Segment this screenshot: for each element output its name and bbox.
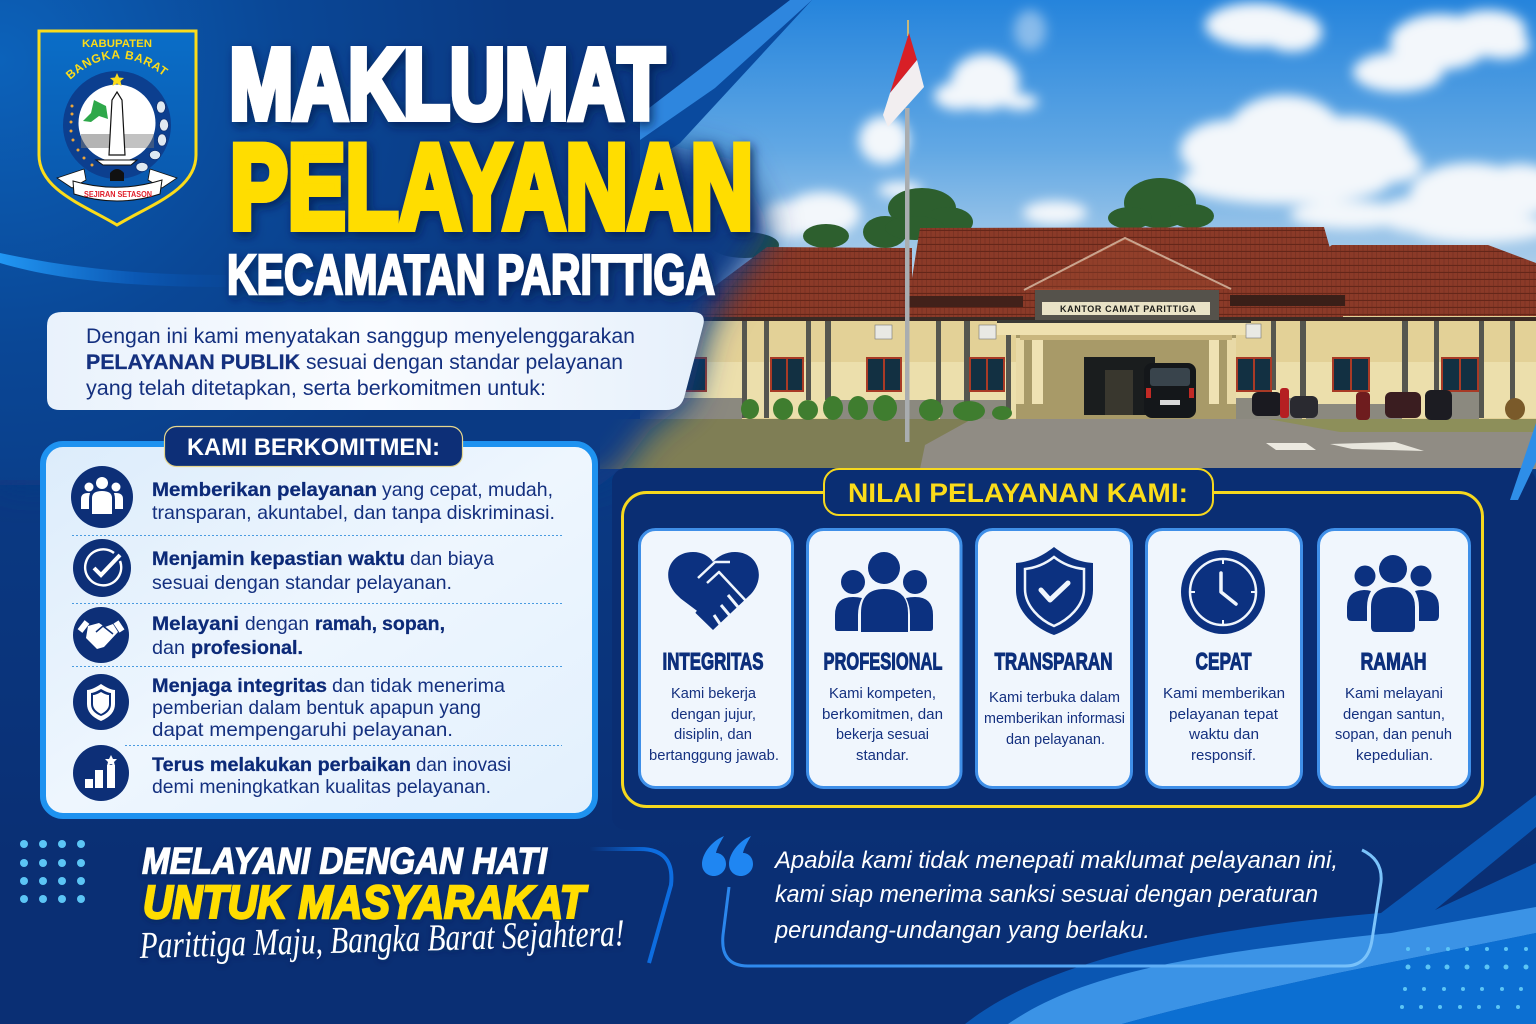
top diagonal band — [0, 0, 812, 170]
card: transparan: memberikan informasi — [984, 711, 1125, 727]
card: integritas: Kami bekerja — [671, 686, 757, 702]
dividers — [72, 536, 562, 746]
icon: handshake — [73, 607, 129, 663]
flag pole — [905, 108, 910, 442]
heading pill: nilai pelayanan: NILAI PELAYANAN KAMI: — [848, 478, 1188, 508]
commitment row 3: sopan, — [382, 613, 445, 635]
card: integritas: INTEGRITAS — [662, 648, 764, 676]
motorcycles — [1252, 388, 1452, 420]
commitment row 1: transparan, akuntabel, dan tanpa diskriminasi. — [152, 502, 555, 524]
heading pill: kami berkomitmen — [164, 426, 462, 466]
shrubs — [741, 395, 1525, 421]
wall base patches — [640, 392, 1479, 419]
quote frame — [723, 850, 1381, 966]
icon: people — [71, 466, 133, 528]
logo: Kabupaten Bangka Barat: KABUPATEN — [82, 38, 152, 50]
card: transparan: Kami terbuka dalam — [989, 690, 1120, 706]
left gradient fill — [0, 0, 560, 480]
commitment row 1 — [71, 466, 555, 528]
slogan line 1: MELAYANI DENGAN HATI — [142, 840, 548, 882]
quote text: kami siap menerima sanksi sesuai dengan peraturan — [775, 881, 1318, 908]
trees — [711, 178, 1214, 258]
quote text — [773, 847, 1338, 944]
commitment row 3: profesional. — [191, 637, 303, 659]
intro text panel: yang telah ditetapkan, serta berkomitmen untuk: — [86, 376, 546, 400]
card: transparan — [976, 530, 1132, 788]
card: integritas: disiplin, dan — [674, 727, 752, 743]
card: cepat: Kami memberikan — [1163, 686, 1285, 702]
commitment row 4: pemberian dalam bentuk apapun yang — [152, 697, 481, 719]
gable — [1035, 290, 1219, 322]
commitment row 5 — [73, 745, 511, 801]
card: cepat: waktu dan — [1188, 727, 1259, 743]
icon: growth chart — [73, 745, 129, 801]
top dark triangle — [0, 0, 790, 200]
card: integritas: dengan jujur, — [671, 707, 756, 723]
card: profesional: berkomitmen, dan — [822, 707, 943, 723]
icon: people — [1347, 555, 1439, 632]
icon: heart handshake — [668, 552, 759, 630]
dot grid bottom right — [1400, 947, 1528, 1009]
card: profesional: PROFESIONAL — [824, 648, 942, 676]
streak right of nilai panel — [1510, 423, 1536, 500]
roofs — [909, 227, 1343, 318]
commitment row 2: dan biaya — [410, 548, 494, 570]
card: ramah: dengan santun, — [1343, 707, 1445, 723]
windows — [681, 358, 1478, 391]
card: integritas: bertanggung jawab. — [649, 748, 779, 764]
card: profesional: bekerja sesuai — [836, 727, 929, 743]
heading pill: kami berkomitmen: KAMI BERKOMITMEN: — [187, 434, 440, 461]
card: ramah — [1318, 530, 1470, 788]
panel backdrop fade over photo — [0, 143, 772, 485]
card: profesional: standar. — [856, 748, 909, 764]
title line: Kecamatan Parittiga: KECAMATAN PARITTIGA — [227, 243, 715, 306]
slogan line 2: UNTUK MASYARAKAT — [143, 876, 588, 928]
quote text: Apabila kami tidak menepati maklumat pelayanan ini, — [773, 847, 1338, 874]
commitment row 4: Menjaga integritas — [152, 675, 327, 697]
commitment row 5: dan inovasi — [416, 754, 511, 776]
card: ramah: kepedulian. — [1356, 748, 1433, 764]
title line: Pelayanan: PELAYANAN — [230, 120, 753, 254]
quote text: perundang-undangan yang berlaku. — [774, 917, 1150, 944]
icon: quotation mark — [702, 836, 753, 876]
commitment row 3: Melayani — [152, 613, 239, 635]
commitment row 3 — [73, 607, 445, 663]
commitment row 2 — [73, 539, 494, 597]
lower fade — [0, 470, 1536, 1024]
icon: check — [73, 539, 131, 597]
logo: Kabupaten Bangka Barat — [38, 30, 198, 227]
left wave — [0, 253, 226, 287]
entrance — [1016, 335, 1236, 420]
clouds — [758, 3, 1536, 243]
card: profesional — [808, 530, 961, 788]
intro text panel: sesuai dengan standar pelayanan — [306, 350, 623, 374]
card: integritas — [640, 530, 792, 788]
commitment row 3: ramah, — [315, 613, 377, 635]
panel: nilai pelayanan kami — [622, 469, 1482, 806]
icon: shield check — [1016, 547, 1093, 635]
card: ramah: RAMAH — [1360, 648, 1426, 676]
commitment row 1: yang cepat, mudah, — [382, 479, 553, 501]
icon: shield — [73, 674, 129, 730]
commitment row 5: Terus melakukan perbaikan — [152, 754, 411, 776]
logo: Kabupaten Bangka Barat: SEJIRAN SETASON — [84, 189, 152, 199]
commitment row 2: Menjamin kepastian waktu — [152, 548, 405, 570]
card: ramah: sopan, dan penuh — [1335, 727, 1452, 743]
heading pill: nilai pelayanan — [824, 469, 1213, 515]
sign board — [1042, 302, 1210, 315]
commitment row 2: sesuai dengan standar pelayanan. — [152, 572, 452, 594]
intro text panel: PELAYANAN PUBLIK — [86, 350, 300, 374]
card: cepat: pelayanan tepat — [1169, 707, 1278, 723]
car — [1144, 363, 1196, 418]
AC units — [875, 324, 1261, 339]
commitment row 3: dengan — [245, 613, 309, 635]
sky — [600, 0, 1536, 300]
commitment row 3: dan — [152, 637, 185, 659]
title: main heading — [227, 28, 753, 306]
commitment row 5: demi meningkatkan kualitas pelayanan. — [152, 776, 491, 798]
logo: Kabupaten Bangka Barat: BANGKA BARAT — [66, 50, 168, 80]
icon: team — [835, 552, 933, 632]
slogan script line: Parittiga Maju, Bangka Barat Sejahtera! — [138, 912, 625, 967]
slogan block — [138, 840, 625, 967]
sign board: KANTOR CAMAT PARITTIGA — [1060, 304, 1196, 314]
diagonal light stripe — [640, 0, 812, 140]
flag — [883, 33, 924, 127]
card: transparan: dan pelayanan. — [1006, 732, 1105, 748]
card: transparan: TRANSPARAN — [994, 648, 1112, 676]
panel: nilai pelayanan backdrop — [612, 468, 1536, 830]
building wall — [680, 316, 1536, 420]
title line: Maklumat: MAKLUMAT — [230, 28, 664, 140]
ground — [600, 419, 1536, 469]
commitment row 4 — [73, 674, 505, 741]
card: cepat: CEPAT — [1196, 648, 1252, 676]
commitment row 1: Memberikan pelayanan — [152, 479, 377, 501]
card: cepat: responsif. — [1191, 748, 1256, 764]
commitment row 4: dan tidak menerima — [332, 675, 505, 697]
photo: kantor camat building and sky — [600, 0, 1536, 469]
intro text panel: Dengan ini kami menyatakan sanggup menyelenggarakan — [86, 324, 635, 348]
dot grid bottom left — [20, 840, 85, 903]
panel: kami berkomitmen — [43, 426, 595, 816]
slogan bracket — [590, 849, 671, 963]
commitment row 4: dapat mempengaruhi pelayanan. — [152, 719, 453, 741]
card: profesional: Kami kompeten, — [829, 686, 936, 702]
intro text panel — [47, 312, 704, 410]
wall columns — [742, 320, 1515, 418]
card: cepat — [1146, 530, 1302, 788]
decorative wave bottom right — [965, 795, 1536, 1024]
icon: clock — [1181, 550, 1265, 634]
card: ramah: Kami melayani — [1345, 686, 1443, 702]
